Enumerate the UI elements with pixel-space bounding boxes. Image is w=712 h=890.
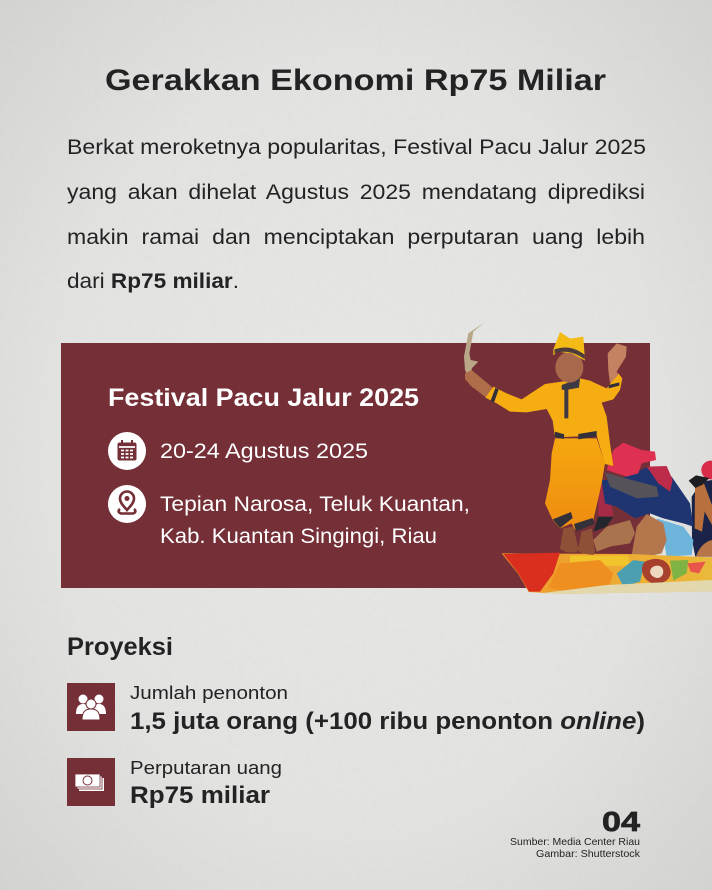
source credits: Gambar: Shutterstock <box>536 848 641 860</box>
panel: festival info <box>61 343 650 588</box>
head <box>555 352 583 383</box>
festival heading: Festival Pacu Jalur 2025 <box>108 384 419 412</box>
rower front <box>593 443 693 557</box>
audience value: 1,5 juta orang (+100 ribu penonton online) <box>130 708 645 735</box>
source credits: Sumber: Media Center Riau <box>510 836 640 848</box>
location <box>160 493 470 548</box>
money label: Perputaran uang <box>130 758 282 778</box>
projection item: audience <box>67 683 645 735</box>
shirt <box>485 373 622 466</box>
boat <box>502 553 712 594</box>
feet <box>560 527 595 555</box>
page number: 04 <box>602 806 641 837</box>
trousers <box>545 438 605 530</box>
intro paragraph: Berkat meroketnya popularitas, Festival Pacu Jalur 2025 <box>67 136 646 159</box>
intro paragraph: makin ramai dan menciptakan perputaran uang lebih <box>67 226 645 249</box>
projection item: money <box>67 758 282 809</box>
intro paragraph: dari Rp75 miliar . <box>67 270 239 293</box>
money value: Rp75 miliar <box>130 782 270 809</box>
icon: people <box>67 683 115 731</box>
icon: banknotes <box>67 758 115 806</box>
icon: calendar <box>108 432 146 470</box>
intro paragraph: yang akan dihelat Agustus 2025 mendatang diprediksi <box>67 181 645 204</box>
location: Tepian Narosa, Teluk Kuantan, <box>160 493 470 516</box>
photo: pacu jalur boat and dancing boy <box>464 322 712 594</box>
icon: location pin <box>108 485 146 523</box>
dancing boy <box>464 322 627 555</box>
title: Gerakkan Ekonomi Rp75 Miliar <box>105 64 606 97</box>
raised hands <box>465 370 492 397</box>
projection heading: Proyeksi <box>67 633 173 661</box>
intro paragraph <box>67 136 646 293</box>
hat <box>553 332 585 361</box>
location: Kab. Kuantan Singingi, Riau <box>160 525 437 548</box>
date: 20-24 Agustus 2025 <box>160 440 368 463</box>
rower back <box>689 461 712 557</box>
sword <box>464 322 484 388</box>
source credits <box>510 836 641 860</box>
audience label: Jumlah penonton <box>130 683 288 703</box>
